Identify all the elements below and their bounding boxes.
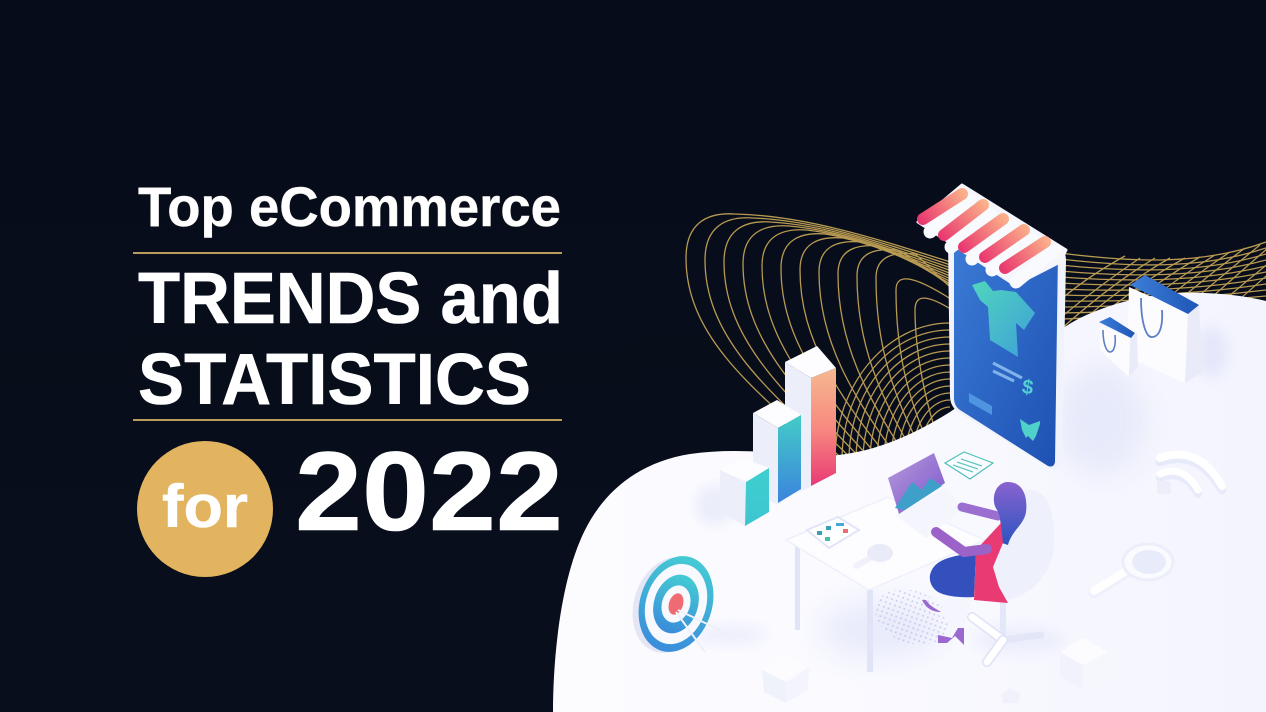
icon: t-shirt xyxy=(972,281,1035,357)
gold wire mesh xyxy=(686,214,1266,465)
awning xyxy=(918,185,1066,285)
desk legs xyxy=(795,546,873,672)
button xyxy=(969,393,992,415)
small magnifier xyxy=(856,544,893,566)
shoes xyxy=(922,600,964,645)
dress xyxy=(974,523,1008,603)
decorative cubes xyxy=(762,638,1108,703)
divider: lower gold rule xyxy=(133,419,562,421)
office chair base xyxy=(972,600,1041,662)
cube right xyxy=(1060,638,1108,690)
large bag xyxy=(1127,275,1203,383)
divider: upper gold rule xyxy=(133,252,562,254)
heading: STATISTICS: STATISTICS xyxy=(138,340,531,420)
stippled floor shadow xyxy=(867,580,957,654)
middle bar xyxy=(753,400,801,505)
icon: wifi xyxy=(1157,454,1222,494)
heading: TRENDS and: TRENDS and xyxy=(138,259,563,339)
desk xyxy=(786,452,993,672)
tall bar xyxy=(785,346,836,497)
smartphone store xyxy=(918,185,1066,469)
phone screen xyxy=(954,240,1058,466)
heading: Top eCommerce: Top eCommerce xyxy=(138,175,561,238)
icon: magnifying glass xyxy=(1094,544,1173,593)
shopping bags xyxy=(1099,275,1203,383)
icon: shopping cart xyxy=(1020,419,1040,441)
soft shadows on the landscape xyxy=(694,326,1228,658)
laptop xyxy=(888,453,965,538)
title block xyxy=(133,175,563,577)
price lines xyxy=(993,363,1022,381)
bar chart xyxy=(720,346,836,526)
phone body xyxy=(948,232,1066,469)
white landscape xyxy=(553,293,1266,712)
skirt xyxy=(930,553,976,597)
short bar xyxy=(720,458,769,526)
hair xyxy=(994,482,1026,545)
small bag xyxy=(1099,317,1138,377)
icon: target with arrows xyxy=(621,546,726,663)
badge: for xyxy=(137,441,273,577)
tablet xyxy=(807,517,859,548)
heading: 2022: 2022 xyxy=(295,429,563,554)
dollar sign: $ xyxy=(1021,376,1035,399)
cube small xyxy=(1001,688,1020,703)
badge: for: for xyxy=(162,473,248,540)
clipboard xyxy=(945,452,993,479)
desk top xyxy=(786,497,985,590)
back arm xyxy=(962,507,998,516)
cube left xyxy=(762,655,809,703)
front arm xyxy=(936,532,987,552)
woman at desk xyxy=(922,482,1026,645)
legs xyxy=(940,592,972,640)
chair back xyxy=(991,490,1054,600)
